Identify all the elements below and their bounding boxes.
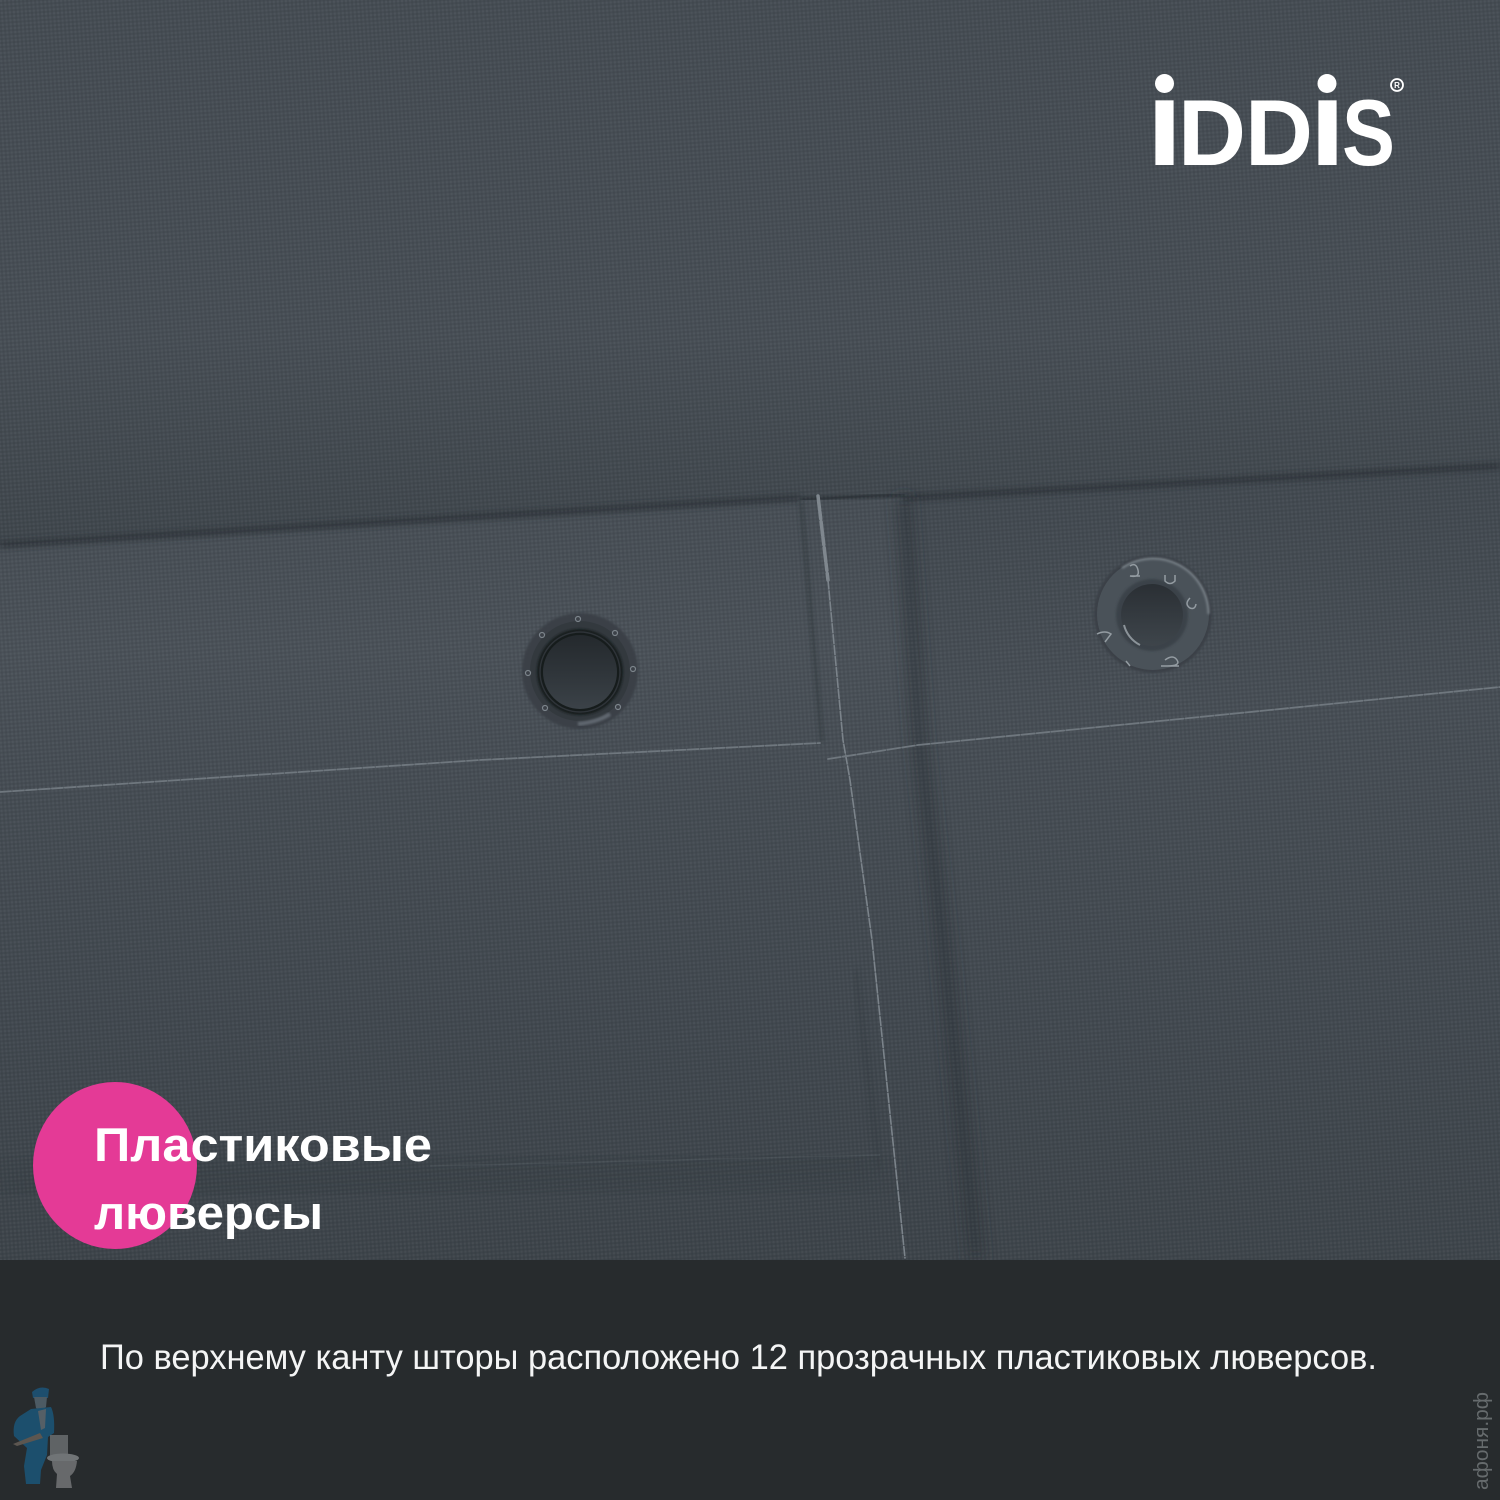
logo: IDDIS: D [1178, 80, 1246, 185]
icon: right grommet [1094, 555, 1212, 673]
logo: IDDIS: S [1342, 80, 1395, 185]
logo: IDDIS: I [1310, 80, 1345, 185]
logo: IDDIS: R [1394, 81, 1400, 90]
panel: upper fabric [0, 0, 1500, 560]
heading [94, 1118, 432, 1239]
heading: люверсы [94, 1186, 323, 1239]
logo: IDDIS: I [1147, 80, 1182, 185]
icon: plumber mascot [13, 1388, 79, 1488]
panel: bottom caption bar [0, 1260, 1500, 1500]
logo: IDDIS: D [1245, 80, 1313, 185]
fabric shading [0, 466, 1500, 1260]
heading: Пластиковые [94, 1118, 432, 1171]
icon: left grommet [522, 613, 638, 729]
text block: watermark: афоня.рф [1471, 1392, 1493, 1490]
panel: lower left fabric [0, 494, 980, 1260]
panel: lower right fabric [903, 465, 1500, 1260]
logo: IDDIS [1147, 74, 1403, 185]
icon: pink circle accent [33, 1082, 197, 1249]
stitching [0, 496, 1500, 1258]
text block: caption: По верхнему канту шторы расположено 12 прозрачных пластиковых люверсов. [100, 1337, 1377, 1377]
